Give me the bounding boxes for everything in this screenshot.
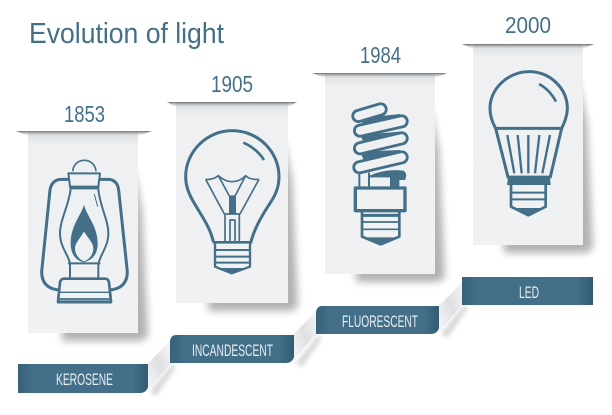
ribbon folds [146, 282, 462, 393]
ribbon: fluorescent [316, 306, 439, 334]
icon: fluorescent spiral bulb [355, 109, 406, 244]
year: 1984: 1984 [360, 42, 401, 68]
panel: fluorescent 1984 [312, 42, 447, 282]
year: 1905: 1905 [211, 71, 253, 97]
ribbon: LED [462, 277, 593, 305]
icon: kerosene lantern [42, 160, 127, 303]
panel: kerosene 1853 [16, 101, 152, 341]
ribbon fold shadows [150, 305, 468, 396]
icon: incandescent bulb [186, 131, 279, 273]
ribbon: fluorescent: FLUORESCENT [342, 312, 418, 331]
year: 1853: 1853 [64, 101, 105, 127]
panel: LED 2000 [462, 12, 594, 253]
ribbon: kerosene: KEROSENE [56, 370, 113, 389]
ribbon: kerosene [18, 364, 148, 393]
ribbon: incandescent: INCANDESCENT [192, 341, 273, 360]
ribbon: LED: LED [519, 283, 539, 302]
title: Evolution of light [29, 18, 224, 50]
ribbon: incandescent [170, 335, 294, 363]
year: 2000: 2000 [505, 12, 551, 38]
panel: incandescent 1905 [167, 71, 298, 311]
icon: LED bulb [490, 72, 567, 215]
